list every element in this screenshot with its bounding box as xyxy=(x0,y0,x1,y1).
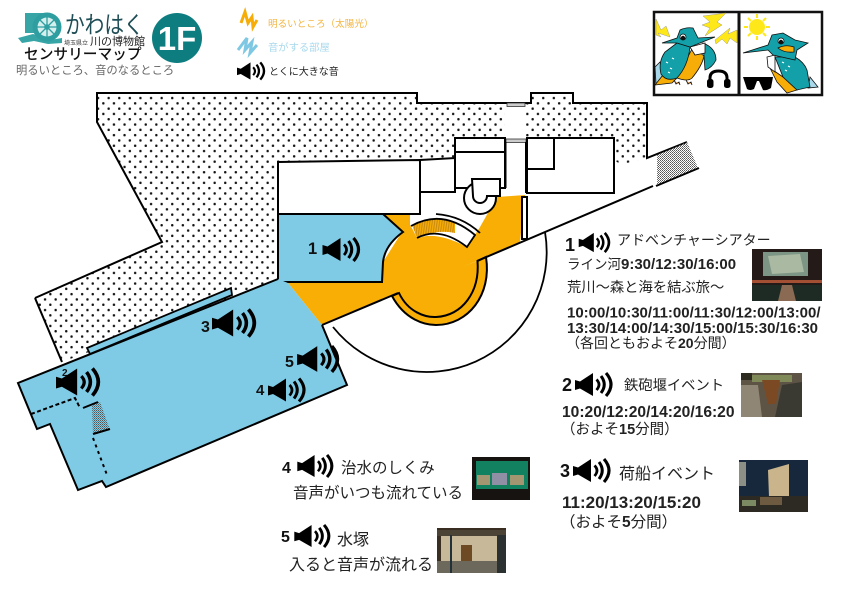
info: 2 teppo-zeki event: （およそ15分間） xyxy=(561,421,679,438)
icon: sunglasses xyxy=(743,77,773,90)
speaker 2 on map: 2 xyxy=(62,368,68,379)
info: 1 adventure theater: 荒川〜森と海を結ぶ旅〜 xyxy=(567,279,724,296)
speaker 3 on map xyxy=(201,309,254,337)
legend: loud sound: とくに大きな音 xyxy=(269,65,339,78)
photo: teppo-zeki xyxy=(741,373,802,417)
info: 3 cargo boat event: （およそ5分間） xyxy=(560,513,677,531)
legend: bright places xyxy=(241,12,374,30)
blue strip xyxy=(87,288,232,354)
left bird xyxy=(655,28,716,85)
photo: mizuka xyxy=(437,528,506,573)
orange bright area xyxy=(288,195,525,325)
floor badge 1F: 1F xyxy=(158,20,196,57)
info: 4 flood control xyxy=(282,455,463,502)
info: 3 cargo boat event: 荷船イベント xyxy=(619,465,715,483)
speaker 4 on map xyxy=(256,378,304,402)
icon: sun xyxy=(744,14,770,40)
vents xyxy=(506,103,526,142)
info: 4 flood control: 音声がいつも流れている xyxy=(293,484,463,502)
white rooms xyxy=(278,138,614,239)
info: 1 adventure theater: 10:00/10:30/11:00/11:30/12:00/13:00/ xyxy=(567,304,821,322)
semicircle court xyxy=(333,232,547,372)
info: 2 teppo-zeki event: 2 xyxy=(562,375,572,395)
info: 3 cargo boat event: 3 xyxy=(560,461,570,481)
info: 1 adventure theater: ライン河9:30/12:30/16:00 xyxy=(567,256,736,273)
right bird xyxy=(743,33,818,93)
info: 4 flood control: 治水のしくみ xyxy=(341,459,435,477)
hall internal dashed walls xyxy=(31,398,110,475)
info: 3 cargo boat event xyxy=(560,459,715,531)
legend: bright places: 明るいところ（太陽光） xyxy=(268,18,374,30)
speaker 1 on map: 1 xyxy=(308,240,317,258)
blue main hall xyxy=(18,279,347,490)
outdoor dotted area xyxy=(35,93,647,362)
floor map xyxy=(18,93,699,490)
info: 2 teppo-zeki event xyxy=(561,373,735,438)
main diagonal wall xyxy=(322,186,653,325)
info: 5 mizuka: 5 xyxy=(281,529,290,546)
icon: headphones xyxy=(707,71,730,88)
info: 5 mizuka: 水塚 xyxy=(337,531,369,549)
speaker 5 on map xyxy=(285,346,337,372)
illustration: kingfisher panels xyxy=(654,12,822,95)
photo: cargo boat xyxy=(739,460,808,512)
legend: loud sound xyxy=(237,62,339,80)
info: 2 teppo-zeki event: 10:20/12:20/14:20/16:20 xyxy=(562,404,735,421)
hatched entrance xyxy=(656,142,699,186)
photo: theater xyxy=(752,249,822,301)
logo: museum name: かわはく xyxy=(65,11,144,38)
lightning bolts xyxy=(656,13,737,44)
speaker 1 on map xyxy=(308,238,358,261)
info: 3 cargo boat event: 11:20/13:20/15:20 xyxy=(562,493,701,512)
speaker 3 on map: 3 xyxy=(201,319,210,336)
central white gap xyxy=(505,103,526,139)
subtitle: 明るいところ、音のなるところ xyxy=(16,63,174,77)
info: 1 adventure theater: 1 xyxy=(565,235,575,255)
info: 4 flood control: 4 xyxy=(282,460,291,477)
speaker 5 on map: 5 xyxy=(285,354,294,371)
hatched stage arc xyxy=(411,214,480,247)
legend: rooms with sound: 音がする部屋 xyxy=(268,41,330,54)
logo: museum name: 埼玉県立 xyxy=(64,39,88,47)
speaker 2 on map xyxy=(56,368,98,396)
info: 5 mizuka xyxy=(281,525,433,574)
logo: museum name: 川の博物館 xyxy=(90,34,145,48)
logo: water wheel xyxy=(18,12,62,44)
white interior xyxy=(278,138,653,290)
title: sensory map: センサリーマップ xyxy=(24,46,142,63)
building outline xyxy=(35,93,687,298)
info: 1 adventure theater: （各回ともおよそ20分間） xyxy=(566,335,736,351)
floor badge 1F xyxy=(152,13,202,63)
photo: flood control xyxy=(472,457,530,500)
info: 2 teppo-zeki event: 鉄砲堰イベント xyxy=(624,377,724,394)
info: 1 adventure theater: アドベンチャーシアター xyxy=(617,232,771,248)
info: 1 adventure theater: 13:30/14:00/14:30/15:00/15:30/16:30 xyxy=(567,320,818,337)
speaker 4 on map: 4 xyxy=(256,382,265,399)
info: 1 adventure theater xyxy=(565,232,821,351)
legend: rooms with sound xyxy=(238,38,330,54)
info: 5 mizuka: 入ると音声が流れる xyxy=(289,556,433,574)
blue room 1 xyxy=(278,214,403,282)
